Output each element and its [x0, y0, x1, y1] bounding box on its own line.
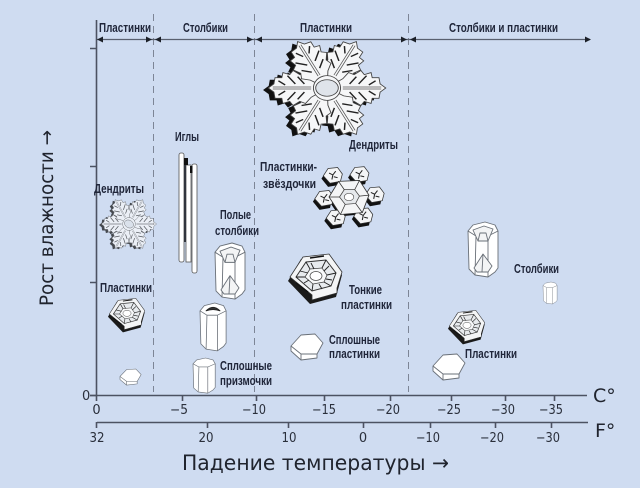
Fahrenheit axis: −20: [480, 431, 504, 446]
Celsius axis: −35: [539, 403, 563, 418]
Celsius axis: −25: [437, 403, 461, 418]
label: solid plates: [329, 332, 380, 361]
label: solid plates: пластинки: [329, 346, 380, 361]
zone heading: columns: Столбики: [183, 20, 228, 35]
horizontal axis title: Падение температуры →: [182, 451, 449, 475]
Fahrenheit axis: 0: [359, 431, 367, 446]
icon: solid prism: [193, 358, 215, 393]
icon: hollow column right: [468, 222, 498, 277]
icon: solid plate middle: [291, 334, 323, 360]
label: needles: Иглы: [175, 129, 199, 144]
icon: thin plate left: [108, 298, 145, 332]
label: columns right: Столбики: [514, 261, 559, 276]
icon: solid column: [200, 303, 226, 351]
Celsius axis: −10: [242, 403, 266, 418]
Fahrenheit axis: F°: [595, 420, 615, 442]
Celsius axis: 0: [82, 389, 90, 404]
zone heading: plates 1: Пластинки: [99, 20, 151, 35]
Fahrenheit axis: −10: [416, 431, 440, 446]
Celsius axis: −30: [491, 403, 515, 418]
Fahrenheit axis: −30: [536, 431, 560, 446]
Celsius axis: −5: [170, 403, 188, 418]
label: thin plates: [341, 282, 392, 312]
icon: star plate: [313, 167, 384, 229]
label: hollow columns: Полые: [220, 207, 251, 222]
label: star plates: Пластинки-: [260, 159, 317, 174]
Celsius axis: 0: [92, 403, 101, 418]
Fahrenheit axis: 32: [90, 431, 104, 446]
label: dendrites left: Дендриты: [94, 181, 144, 196]
Celsius axis: −15: [312, 403, 336, 418]
icon: solid plate right: [433, 354, 465, 380]
label: hollow columns: столбики: [215, 223, 259, 238]
icon: thin plate right: [448, 310, 485, 344]
icon: small column right: [543, 282, 557, 304]
zone band with arrows: [97, 36, 591, 42]
label: plates right: Пластинки: [465, 346, 517, 361]
icon: needles: [179, 153, 197, 273]
Celsius axis: [82, 385, 616, 418]
Fahrenheit axis: 20: [198, 431, 214, 446]
Fahrenheit axis: [90, 420, 615, 446]
icon: thin plate middle: [288, 254, 342, 304]
zone heading: plates 2: Пластинки: [300, 20, 352, 35]
Fahrenheit axis: 10: [282, 431, 296, 446]
label: star plates: звёздочки: [263, 176, 316, 191]
label: star plates: [260, 159, 317, 191]
label: plates left: Пластинки: [100, 280, 152, 295]
vertical axis title: Рост влажности →: [36, 130, 58, 306]
label: solid prisms: [220, 358, 272, 388]
label: thin plates: Тонкие: [349, 282, 382, 297]
label: solid prisms: призмочки: [220, 373, 272, 388]
label: solid plates: Сплошные: [329, 332, 380, 347]
vertical axis: growth of humidity: [90, 20, 96, 396]
Celsius axis: C°: [593, 385, 616, 407]
label: solid prisms: Сплошные: [220, 358, 272, 373]
dashed dividers between crystal-type zones: [154, 14, 408, 392]
Celsius axis: −20: [376, 403, 400, 418]
icon: hollow column left: [215, 243, 245, 299]
zone heading: columns and plates: Столбики и пластинки: [449, 20, 558, 35]
icon: large dendrite: [240, 13, 409, 166]
icon: small solid plate: [120, 369, 141, 385]
label: dendrites middle: Дендриты: [349, 137, 398, 152]
label: thin plates: пластинки: [341, 297, 392, 312]
label: hollow columns: [215, 207, 259, 238]
icon: small dendrite: [88, 184, 167, 265]
